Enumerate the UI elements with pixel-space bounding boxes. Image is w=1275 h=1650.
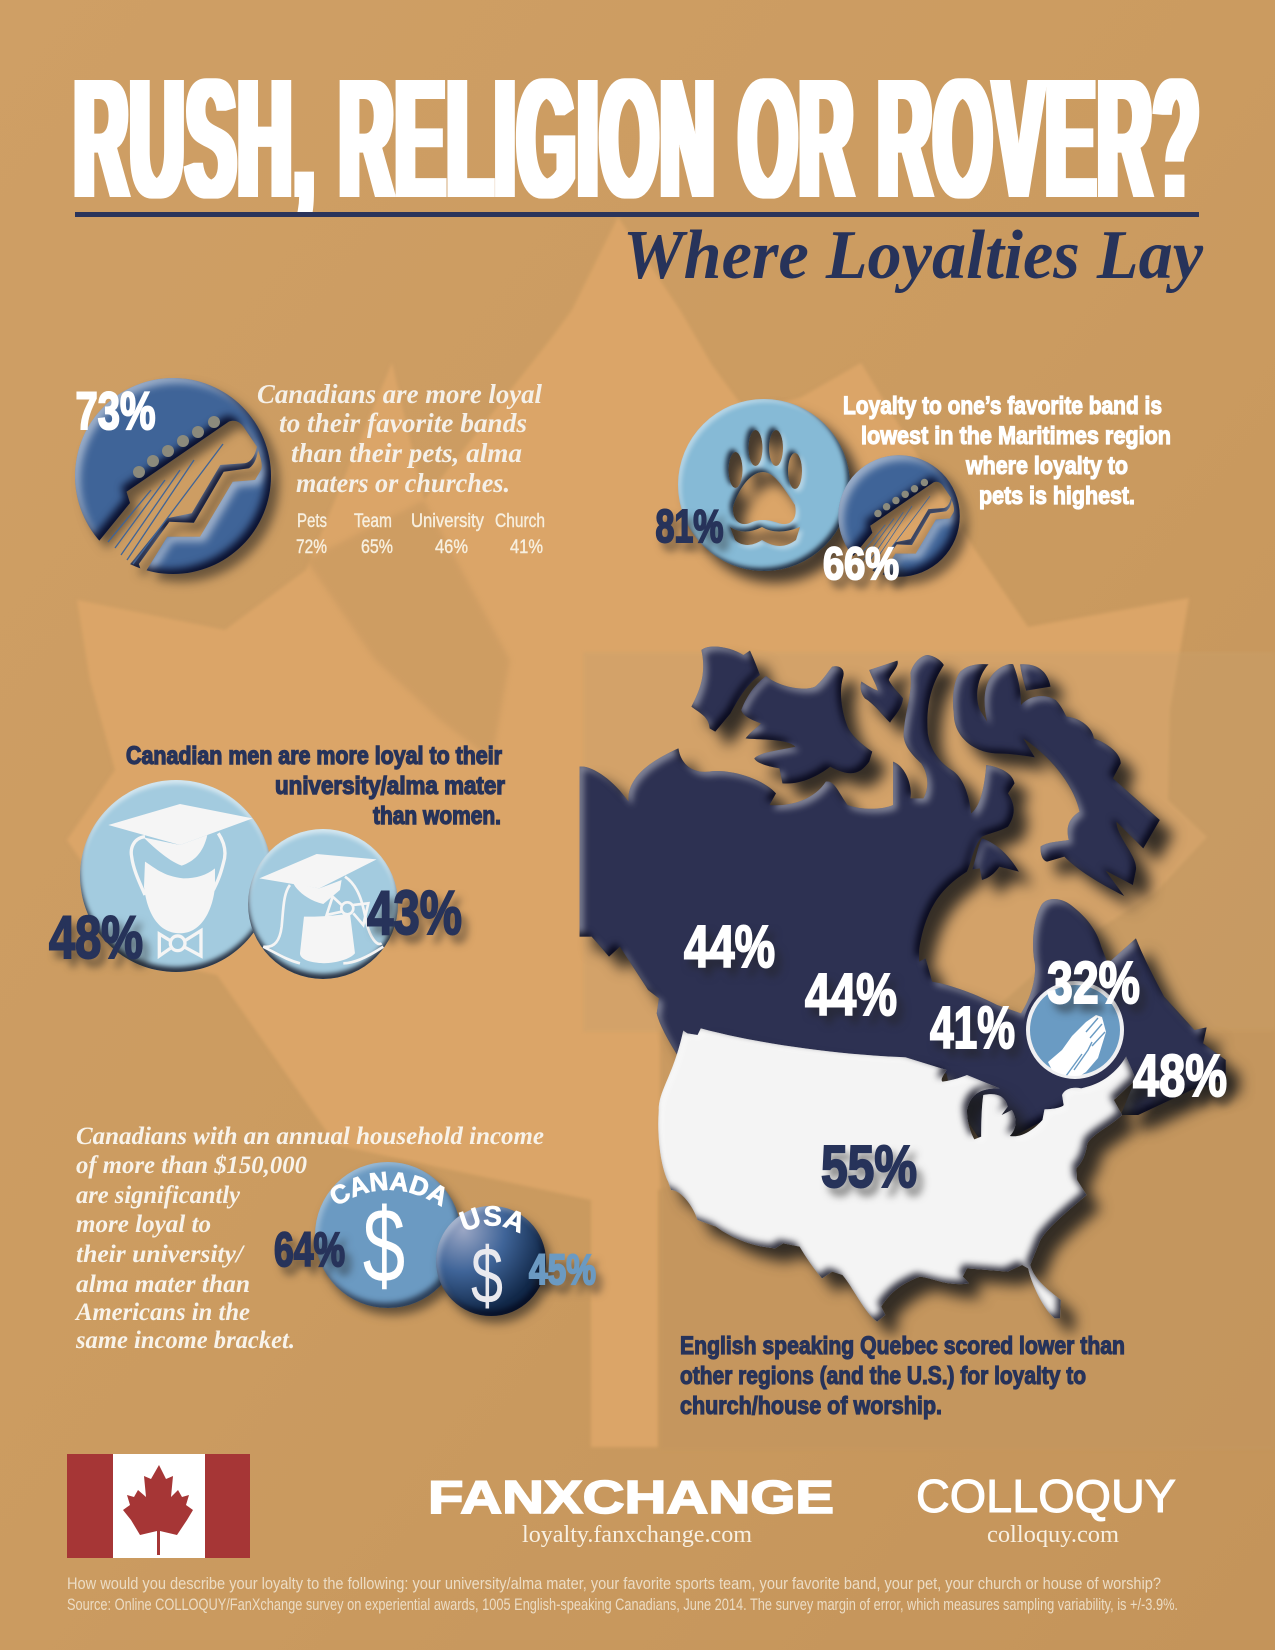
title: RUSH, RELIGION OR ROVER? <box>74 43 1199 233</box>
map: United States <box>658 1028 1135 1322</box>
stat: U.S. 55%: 55% <box>821 1134 917 1200</box>
text: bands statement: than their pets, alma <box>291 438 522 468</box>
loyalty table: Church <box>495 510 545 532</box>
text: income statement: of more than $150,000 <box>76 1152 307 1179</box>
text: men statement: university/alma mater <box>275 772 505 800</box>
text: bands statement: to their favorite bands <box>279 408 527 438</box>
text: maritimes statement: Loyalty to one’s favorite band is <box>843 392 1162 420</box>
stat: Alberta/West 44%: 44% <box>684 914 775 980</box>
loyalty table: Team <box>354 510 392 532</box>
stat: Quebec 32%: 32% <box>1047 950 1140 1016</box>
text: Quebec statement <box>680 1332 1125 1420</box>
stat: 45%: 45% <box>529 1246 596 1294</box>
title rule <box>75 212 1199 217</box>
icon: USA dollar circle <box>434 1206 557 1330</box>
panel: income <box>74 1123 607 1354</box>
lower map backdrop tint <box>660 1030 1275 1450</box>
stat: 48%: 48% <box>49 904 143 971</box>
logo: Colloquy: COLLOQUY <box>916 1470 1176 1522</box>
text: bands statement: maters or churches. <box>296 468 510 498</box>
text: income statement: same income bracket. <box>75 1327 295 1354</box>
footnote <box>67 1574 1178 1614</box>
icon: female graduate <box>248 829 398 979</box>
text: men statement: than women. <box>373 802 501 830</box>
text: bands statement: Canadians are more loyal <box>257 379 542 409</box>
icon: small guitar circle <box>838 455 960 577</box>
icon: Canadian flag <box>67 1454 250 1558</box>
text: income statement: are significantly <box>76 1182 241 1209</box>
link: colloquy.com: colloquy.com <box>987 1522 1119 1548</box>
loyalty table <box>296 510 545 558</box>
icon: Canada dollar circle: $ <box>363 1186 405 1305</box>
text: maritimes statement: where loyalty to <box>965 452 1128 480</box>
text: income statement: more loyal to <box>76 1211 211 1238</box>
icon: paw circle <box>678 399 850 571</box>
subtitle: Where Loyalties Lay <box>623 217 1204 294</box>
panel: maritimes <box>656 392 1171 589</box>
map: Canada <box>580 646 1226 1138</box>
loyalty table: Pets <box>297 510 327 532</box>
background maple leaf <box>67 217 1207 1447</box>
loyalty table: 65% <box>361 536 393 558</box>
icon: male graduate <box>80 780 272 972</box>
icon: guitar headstock 73% <box>75 378 271 574</box>
panel: favorite bands <box>75 378 545 574</box>
icon: Canada dollar circle <box>314 1162 466 1322</box>
stat: 81%: 81% <box>656 500 724 552</box>
icon: Canada dollar circle: CANADA <box>330 1172 445 1207</box>
text: income statement: Canadians with an annual household income <box>76 1123 544 1150</box>
stat: 64%: 64% <box>274 1224 345 1277</box>
loyalty table: 41% <box>510 536 543 558</box>
map backdrop tint <box>583 652 1275 1032</box>
loyalty table: 72% <box>296 536 327 558</box>
icon: USA dollar circle: $ <box>471 1231 503 1320</box>
text: income statement <box>74 1123 544 1354</box>
stat: Ontario 41%: 41% <box>930 995 1015 1061</box>
stat: 43%: 43% <box>367 879 462 948</box>
text: income statement: Americans in the <box>74 1299 250 1326</box>
text: maritimes statement: lowest in the Maritimes region <box>861 422 1171 450</box>
loyalty table: University <box>411 510 484 532</box>
link: loyalty.fanxchange.com: loyalty.fanxchange.com <box>522 1522 752 1548</box>
text: men statement <box>126 742 505 830</box>
panel: men vs women <box>49 742 505 979</box>
stat: 66%: 66% <box>823 538 899 589</box>
leaf shading wedge <box>306 500 510 760</box>
stat: Prairies 44%: 44% <box>805 962 897 1028</box>
icon: USA dollar circle: USA <box>458 1206 521 1234</box>
panel: footer <box>67 1454 1178 1614</box>
panel: map <box>580 646 1227 1420</box>
text: bands statement <box>257 379 542 498</box>
text: maritimes statement <box>843 392 1171 510</box>
icon: praying hands circle <box>1023 978 1127 1082</box>
text: maritimes statement: pets is highest. <box>979 482 1135 510</box>
stat: 73%: 73% <box>76 382 156 441</box>
text: Quebec statement: other regions (and the U.S.) for loyalty to <box>680 1362 1086 1390</box>
text: Quebec statement: English speaking Quebec scored lower than <box>680 1332 1125 1360</box>
text: Quebec statement: church/house of worship. <box>680 1392 942 1420</box>
text: men statement: Canadian men are more loyal to their <box>126 742 502 770</box>
text: income statement: their university/ <box>76 1241 245 1268</box>
loyalty table: 46% <box>435 536 468 558</box>
logo: FanXchange: FANXCHANGE <box>428 1471 834 1523</box>
stat: Maritimes 48%: 48% <box>1133 1043 1227 1109</box>
text: income statement: alma mater than <box>76 1271 250 1298</box>
